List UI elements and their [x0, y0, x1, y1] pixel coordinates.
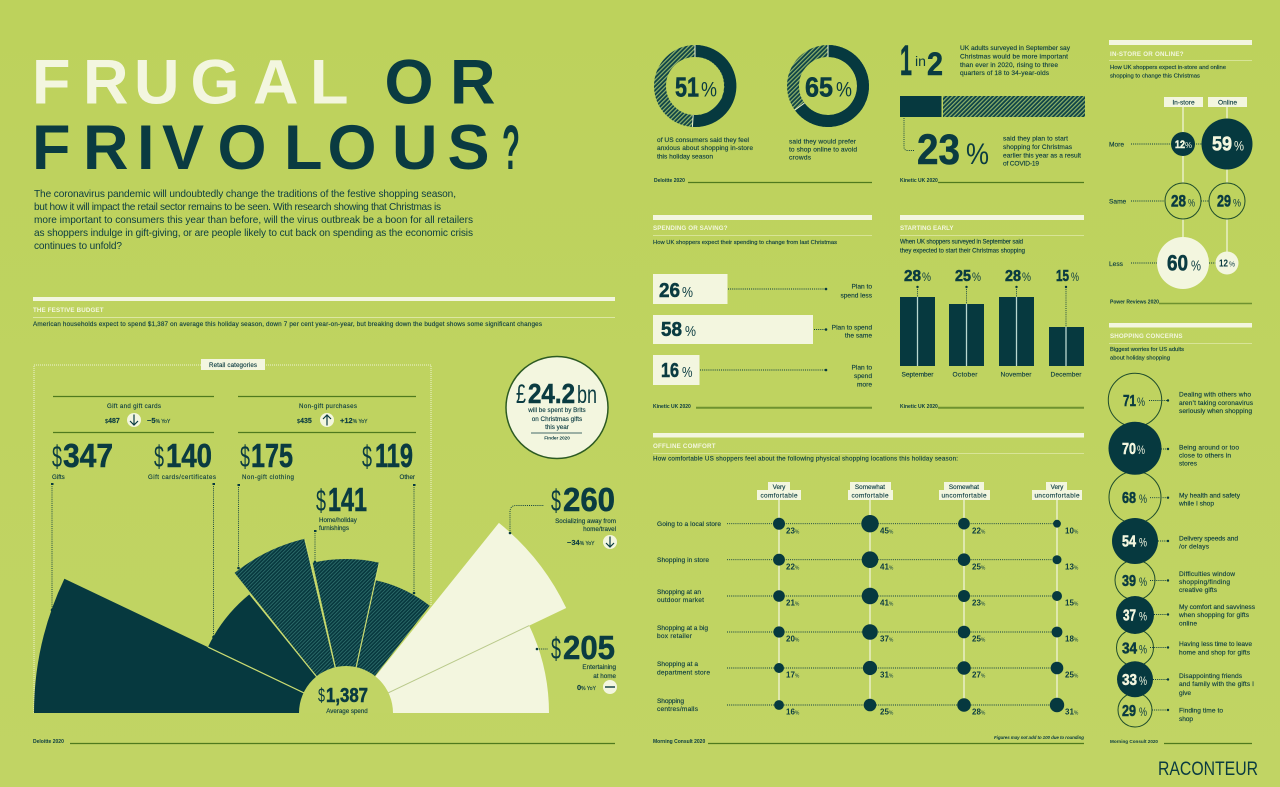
column headers: uncomfortable: [1034, 492, 1080, 499]
item: 39 per cent: Difficulties window: [1179, 571, 1235, 578]
row: department store: 31%: [880, 670, 894, 680]
icon: no change: [603, 680, 617, 694]
intro paragraph: continues to unfold?: [34, 241, 122, 252]
bar: november: November: [1000, 372, 1032, 378]
row: more: 59: [1212, 134, 1232, 156]
stat: non-gift clothing: $: [240, 439, 250, 474]
row: shopping centres: Shopping: [657, 698, 684, 705]
item: 29 per cent: [1122, 703, 1223, 723]
bar: plan to spend less: 26: [659, 280, 680, 302]
stat: socializing: Socializing away from: [555, 518, 616, 525]
row: same: %: [1188, 198, 1195, 210]
intro paragraph: more important to consumers this year than before, will the virus outbreak be a boon for all retailers: [34, 215, 473, 226]
item: 54 per cent: %: [1139, 536, 1147, 550]
source: power reviews: Power Reviews 2020: [1110, 300, 1159, 306]
panel: 1 in 2: 23: [917, 126, 960, 174]
panel: 1 in 2: 1: [900, 37, 912, 85]
bar: september: [900, 268, 935, 378]
row: in store: [657, 551, 1079, 572]
item: 29 per cent: 29: [1122, 703, 1136, 720]
item: 34 per cent: %: [1139, 642, 1147, 656]
column headers: [757, 482, 1082, 500]
panel: starting early: [900, 215, 1084, 410]
row: less: Less: [1109, 261, 1124, 268]
item: 68 per cent: %: [1139, 492, 1147, 506]
item: 54 per cent: Delivery speeds and: [1179, 536, 1238, 542]
column headers: Very: [1051, 484, 1064, 491]
panel: 1 in 2: in: [915, 53, 926, 69]
panel: online donut: 65: [805, 72, 833, 102]
stat: gifts: 347: [63, 437, 113, 474]
group: gift and gift cards: [53, 396, 214, 432]
item: 39 per cent: %: [1139, 575, 1147, 589]
panel: 1 in 2: %: [966, 138, 989, 171]
item: 71 per cent: [1123, 392, 1254, 415]
item: 34 per cent: 34: [1122, 640, 1137, 658]
source: kinetic: Kinetic UK 2020: [900, 178, 938, 184]
callout: uk spending: will be spent by Brits: [527, 407, 586, 414]
panel: in-store or online: How UK shoppers expect in-store and online: [1110, 65, 1227, 71]
callout: uk spending: on Christmas gifts: [532, 416, 582, 423]
item: 34 per cent: [1122, 640, 1252, 658]
bar: plan to spend more: [653, 355, 872, 388]
bar: 23 per cent split: [900, 96, 1085, 117]
icon: up arrow: [320, 413, 334, 427]
heading: spending or saving: SPENDING OR SAVING?: [653, 225, 728, 232]
item: 37 per cent: 37: [1123, 608, 1136, 624]
item: 29 per cent: Finding time to: [1179, 708, 1223, 714]
panel: online donut: [789, 45, 863, 162]
stat: home furnishings: $: [316, 483, 326, 518]
panel: 1 in 2: of COVID-19: [1003, 160, 1039, 168]
item: 34 per cent: home and shop for gifts: [1179, 650, 1251, 656]
dot matrix rows: [657, 515, 1079, 716]
panel: spending or saving: [653, 215, 873, 410]
item: 37 per cent: My comfort and savviness: [1179, 604, 1256, 611]
item: 68 per cent: My health and safety: [1179, 492, 1241, 500]
bar: plan to spend less: Plan to: [851, 284, 872, 290]
panel: online donut: crowds: [789, 154, 812, 162]
source: kinetic: Kinetic UK 2020: [900, 404, 938, 410]
bar: december: December: [1050, 372, 1082, 378]
bar: december: 15: [1056, 268, 1069, 285]
stat: non-gift clothing: Non-gift clothing: [242, 474, 295, 481]
item: 71 per cent: seriously when shopping: [1179, 408, 1252, 415]
stat: socializing: 260: [563, 481, 615, 518]
row: shopping centres: centres/malls: [657, 706, 699, 713]
row: big box retailer: 37%: [880, 634, 894, 644]
row: department store: [657, 661, 1079, 680]
item: 33 per cent: Disappointing friends: [1179, 673, 1243, 680]
bar: plan to spend less: spend less: [840, 292, 873, 300]
intro paragraph: as shoppers indulge in gift-giving, or are people likely to cut back on spending as the economic crisis: [34, 228, 473, 239]
row: less: %: [1191, 258, 1201, 275]
row: shopping centres: [657, 698, 1079, 716]
row: more: [1109, 118, 1252, 170]
item: 68 per cent: [1122, 490, 1241, 508]
row: more: %: [1185, 141, 1192, 150]
row: department store: Shopping at a: [657, 661, 698, 668]
bar: september: %: [922, 270, 931, 284]
row: big box retailer: 20%: [786, 634, 800, 644]
bar: plan to spend less: %: [682, 284, 693, 301]
item: 71 per cent: Dealing with others who: [1179, 392, 1251, 398]
bar: december: %: [1071, 270, 1079, 284]
item: 39 per cent: 39: [1122, 573, 1136, 590]
item: 33 per cent: %: [1139, 674, 1147, 688]
item: 37 per cent: when shopping for gifts: [1178, 612, 1250, 619]
stat: entertaining: at home: [593, 673, 616, 680]
stat: other: Other: [400, 474, 415, 481]
item: 33 per cent: give: [1179, 690, 1191, 697]
stat: home furnishings: [316, 481, 367, 532]
source: morning consult: Morning Consult 2020: [1110, 739, 1158, 744]
item: 33 per cent: [1117, 661, 1254, 697]
stat: other: 119: [375, 437, 413, 474]
bar: plan to spend the same: 58: [661, 319, 682, 341]
title: FRUGAL: [32, 48, 348, 118]
stat: gift cards: Gift cards/certificates: [148, 474, 216, 481]
panel: online donut: said they would prefer: [789, 138, 857, 146]
bar: plan to spend the same: [653, 315, 872, 344]
row: in store: Shopping in store: [657, 557, 709, 564]
center total: $: [318, 686, 325, 707]
item: 29 per cent: %: [1139, 705, 1147, 719]
row: outdoor market: 15%: [1065, 598, 1079, 608]
panel: offline comfort: [653, 433, 1084, 745]
row: outdoor market: 41%: [880, 598, 894, 608]
stat: socializing: −34% YoY: [567, 538, 595, 547]
group: gift and gift cards: −5% YoY: [147, 416, 171, 425]
source: deloitte: Deloitte 2020: [33, 739, 64, 745]
source: morning consult: Morning Consult 2020: [653, 739, 705, 745]
row: same: Same: [1109, 198, 1127, 206]
item: 37 per cent: [1116, 596, 1256, 634]
center total: Average spend: [326, 708, 368, 715]
row: big box retailer: 18%: [1065, 634, 1079, 644]
callout: uk spending: 24.2: [528, 378, 575, 409]
group: non-gift purchases: [238, 396, 416, 432]
panel: spending or saving: How UK shoppers expect their spending to change from last Christmas: [653, 240, 837, 246]
item: 34 per cent: Having less time to leave: [1179, 641, 1252, 648]
item: 37 per cent: %: [1139, 610, 1147, 624]
callout: uk spending: bn: [577, 381, 597, 409]
row: more: %: [1234, 138, 1244, 154]
stat: other: [362, 437, 415, 481]
leader line: [904, 118, 914, 150]
row: local store: [657, 515, 1079, 536]
panel: offline comfort: How comfortable US shoppers feel about the following physical shopping locations this holiday season:: [653, 456, 958, 462]
heading: offline comfort: OFFLINE COMFORT: [653, 443, 716, 450]
bar: october: %: [972, 270, 981, 284]
panel: anxious donut: %: [701, 78, 717, 102]
callout: uk spending: £: [516, 379, 526, 409]
row: outdoor market: 21%: [786, 598, 800, 608]
bar: october: 25: [955, 268, 971, 285]
panel: 1 in 2: shopping for Christmas: [1003, 144, 1073, 151]
row: shopping centres: 31%: [1065, 708, 1079, 716]
row: less: %: [1229, 262, 1235, 268]
row: local store: 45%: [880, 526, 894, 536]
stat: gifts: Gifts: [52, 474, 65, 481]
row: same: %: [1233, 198, 1241, 210]
bar: october: [949, 268, 984, 378]
stat: socializing: home/travel: [583, 526, 616, 533]
panel: anxious donut: this holiday season: [657, 154, 713, 160]
stat: entertaining: Entertaining: [582, 664, 616, 671]
row: more: More: [1109, 142, 1124, 148]
stat: gifts: [52, 437, 113, 481]
row: outdoor market: Shopping at an: [657, 589, 701, 596]
column headers: Online: [1218, 100, 1237, 106]
bar: november: %: [1022, 270, 1031, 284]
row: department store: 25%: [1065, 670, 1079, 680]
item: 68 per cent: 68: [1122, 490, 1136, 507]
row: shopping centres: 25%: [880, 708, 894, 716]
heading: in-store or online: IN-STORE OR ONLINE?: [1110, 51, 1184, 58]
callout: uk spending: Finder 2020: [544, 436, 570, 440]
column headers: comfortable: [852, 492, 889, 499]
retail categories tag: [201, 359, 265, 370]
title: OR: [384, 48, 496, 118]
panel: anxious donut: of US consumers said they feel: [657, 137, 750, 144]
item: 54 per cent: /or delays: [1179, 544, 1210, 550]
item: 70 per cent: stores: [1179, 460, 1198, 468]
logo: raconteur: RACONTEUR: [1158, 759, 1258, 780]
row: local store: 10%: [1065, 526, 1079, 536]
item: 70 per cent: %: [1137, 443, 1145, 457]
bar: plan to spend the same: %: [685, 323, 696, 340]
stat: non-gift clothing: [240, 437, 295, 481]
item: 70 per cent: Being around or too: [1179, 444, 1239, 452]
leader lines: [51, 483, 548, 650]
row: in store: 25%: [972, 562, 986, 572]
panel: in-store or online: [1109, 40, 1252, 306]
bar: september: September: [902, 372, 934, 378]
bar: plan to spend more: 16: [661, 360, 679, 382]
row: shopping centres: 16%: [786, 708, 800, 716]
row: outdoor market: [657, 588, 1079, 608]
panel: 1 in 2: than ever in 2020, rising to three: [960, 62, 1058, 69]
row: less: [1109, 237, 1238, 289]
callout: uk spending: this year: [545, 424, 569, 431]
heading: shopping concerns: SHOPPING CONCERNS: [1110, 333, 1183, 340]
callout: uk spending: [506, 356, 608, 458]
bar: plan to spend more: spend: [854, 373, 872, 380]
column headers: In-store: [1172, 100, 1195, 106]
item: 70 per cent: [1108, 422, 1239, 475]
row: outdoor market: 23%: [972, 598, 986, 608]
item: 37 per cent: online: [1179, 620, 1197, 628]
row: department store: 17%: [786, 670, 800, 680]
item: 71 per cent: 71: [1123, 393, 1136, 410]
center total: [318, 685, 368, 715]
item: 70 per cent: close to others in: [1179, 452, 1231, 460]
stat: home furnishings: furnishings: [319, 525, 349, 532]
chart: budget rose: [34, 523, 566, 713]
bar: plan to spend more: %: [682, 364, 692, 381]
panel: 1 in 2: quarters of 18 to 34-year-olds: [960, 70, 1050, 77]
panel: 1 in 2: 2: [927, 46, 943, 82]
row: local store: 23%: [786, 526, 800, 536]
group: non-gift purchases: Non-gift purchases: [299, 403, 357, 410]
item: 33 per cent: and family with the gifts I: [1179, 681, 1254, 688]
title: [32, 48, 520, 183]
panel: in-store or online: shopping to change this Christmas: [1110, 74, 1200, 80]
row: outdoor market: outdoor market: [657, 597, 704, 604]
panel: online donut: to shop online to avoid: [789, 146, 857, 154]
stat: home furnishings: Home/holiday: [319, 517, 358, 524]
stat: gift cards: $: [154, 439, 164, 474]
bar: december: [1049, 268, 1084, 378]
item: 39 per cent: [1122, 571, 1235, 594]
row: local store: 22%: [972, 526, 986, 536]
item: 54 per cent: [1112, 518, 1238, 564]
bar: november: [999, 268, 1034, 378]
panel: 1 in 2: earlier this year as a result: [1003, 152, 1081, 160]
intro paragraph: [34, 189, 473, 252]
panel: 1 in 2: Christmas would be more important: [960, 54, 1068, 60]
row: big box retailer: Shopping at a big: [657, 625, 708, 632]
stat: other: $: [362, 439, 372, 474]
row: department store: 27%: [972, 670, 986, 680]
row: shopping centres: 28%: [972, 708, 986, 716]
panel: online donut: %: [836, 78, 852, 102]
item: 68 per cent: while I shop: [1178, 500, 1214, 508]
icon: down arrow: [127, 413, 141, 427]
group: gift and gift cards: Gift and gift cards: [107, 403, 161, 410]
row: in store: 13%: [1065, 562, 1079, 572]
heading: the festive budget: THE FESTIVE BUDGET: [33, 307, 104, 314]
column headers: Somewhat: [949, 484, 979, 491]
item: 39 per cent: shopping/finding: [1179, 579, 1230, 586]
panel: starting early: they expected to start their Christmas shopping: [900, 248, 1025, 254]
bar: plan to spend less: [653, 274, 873, 304]
panel: starting early: When UK shoppers surveyed in September said: [900, 240, 1023, 246]
stat: entertaining: [551, 629, 617, 694]
row: less: 60: [1167, 251, 1188, 276]
intro paragraph: The coronavirus pandemic will undoubtedly change the traditions of the festive shopping season,: [34, 189, 456, 200]
stat: entertaining: 205: [563, 629, 615, 666]
row: big box retailer: 25%: [972, 634, 986, 644]
group: non-gift purchases: +12% YoY: [340, 416, 368, 425]
item: 29 per cent: shop: [1179, 716, 1193, 723]
panel: 1 in 2: said they plan to start: [1003, 136, 1068, 142]
panel: shopping concerns: [1108, 323, 1256, 744]
stat: home furnishings: 141: [328, 481, 367, 518]
panel: shopping concerns: about holiday shopping: [1110, 356, 1170, 362]
bar: plan to spend more: more: [857, 382, 872, 388]
column headers: [1164, 97, 1247, 107]
stat: gift cards: 140: [166, 437, 212, 474]
item: 70 per cent: 70: [1122, 441, 1136, 458]
panel: anxious donut: [657, 45, 753, 160]
column headers: Very: [773, 484, 786, 491]
source: morning consult: [653, 735, 1084, 745]
item: 71 per cent: %: [1137, 395, 1145, 409]
group: non-gift purchases: $435: [297, 418, 312, 425]
item: 54 per cent: 54: [1122, 534, 1136, 550]
stat: non-gift clothing: 175: [251, 437, 293, 474]
group: gift and gift cards: $487: [105, 418, 120, 425]
heading: starting early: STARTING EARLY: [900, 225, 954, 232]
bar: november: 28: [1005, 268, 1021, 285]
source: kinetic: Kinetic UK 2020: [653, 404, 691, 410]
text: ?: [502, 113, 520, 183]
row: more: 12: [1175, 139, 1185, 151]
source: morning consult: Figures may not add to 100 due to rounding: [994, 735, 1084, 740]
stat: socializing: $: [551, 483, 561, 518]
budget subtitle: American households expect to spend $1,387 on average this holiday season, down 7 per cent year-on-year, but breaking down the budget shows some significant changes: [33, 321, 542, 328]
stat: gift cards: [148, 437, 216, 481]
row: local store: Going to a local store: [657, 521, 721, 528]
title: FRIVOLOUS: [32, 113, 490, 183]
intro paragraph: but how it will impact the retail sector remains to be seen. With research showing that Christmas is: [34, 202, 441, 213]
column headers: comfortable: [760, 492, 798, 499]
panel: 1 in 2: [900, 37, 1085, 174]
item: 71 per cent: aren’t taking coronavirus: [1179, 400, 1254, 407]
row: in store: 22%: [786, 562, 800, 572]
icon: down arrow: [603, 535, 617, 549]
row: big box retailer: [657, 624, 1079, 644]
bar: september: 28: [904, 268, 921, 285]
row: same: 29: [1217, 192, 1231, 211]
panel: anxious donut: 51: [675, 72, 699, 102]
source: deloitte: Deloitte 2020: [654, 178, 685, 184]
stat: gifts: $: [52, 439, 62, 474]
panel: anxious donut: anxious about shopping in-store: [657, 145, 753, 152]
retail categories tag: Retail categories: [209, 362, 257, 369]
row: less: 12: [1219, 258, 1228, 270]
bar: plan to spend the same: Plan to spend: [832, 324, 872, 332]
row: big box retailer: box retailer: [657, 633, 693, 640]
bar: plan to spend more: Plan to: [851, 364, 872, 372]
column headers: Somewhat: [855, 484, 885, 491]
stat: entertaining: 0% YoY: [577, 683, 597, 692]
panel: shopping concerns: Biggest worries for US adults: [1110, 347, 1184, 353]
column headers: uncomfortable: [942, 492, 987, 499]
item: 33 per cent: 33: [1122, 672, 1137, 689]
panel: 1 in 2: UK adults surveyed in September say: [960, 45, 1071, 52]
row: same: [1109, 183, 1245, 219]
center total: 1,387: [326, 685, 368, 707]
bar: october: October: [952, 372, 978, 378]
item: 39 per cent: creative gifts: [1179, 587, 1218, 594]
bar: plan to spend the same: the same: [845, 332, 872, 340]
row: department store: department store: [657, 670, 710, 676]
row: same: 28: [1171, 192, 1186, 211]
row: in store: 41%: [880, 562, 894, 572]
stat: entertaining: $: [551, 631, 561, 666]
stat: socializing: [551, 481, 617, 549]
